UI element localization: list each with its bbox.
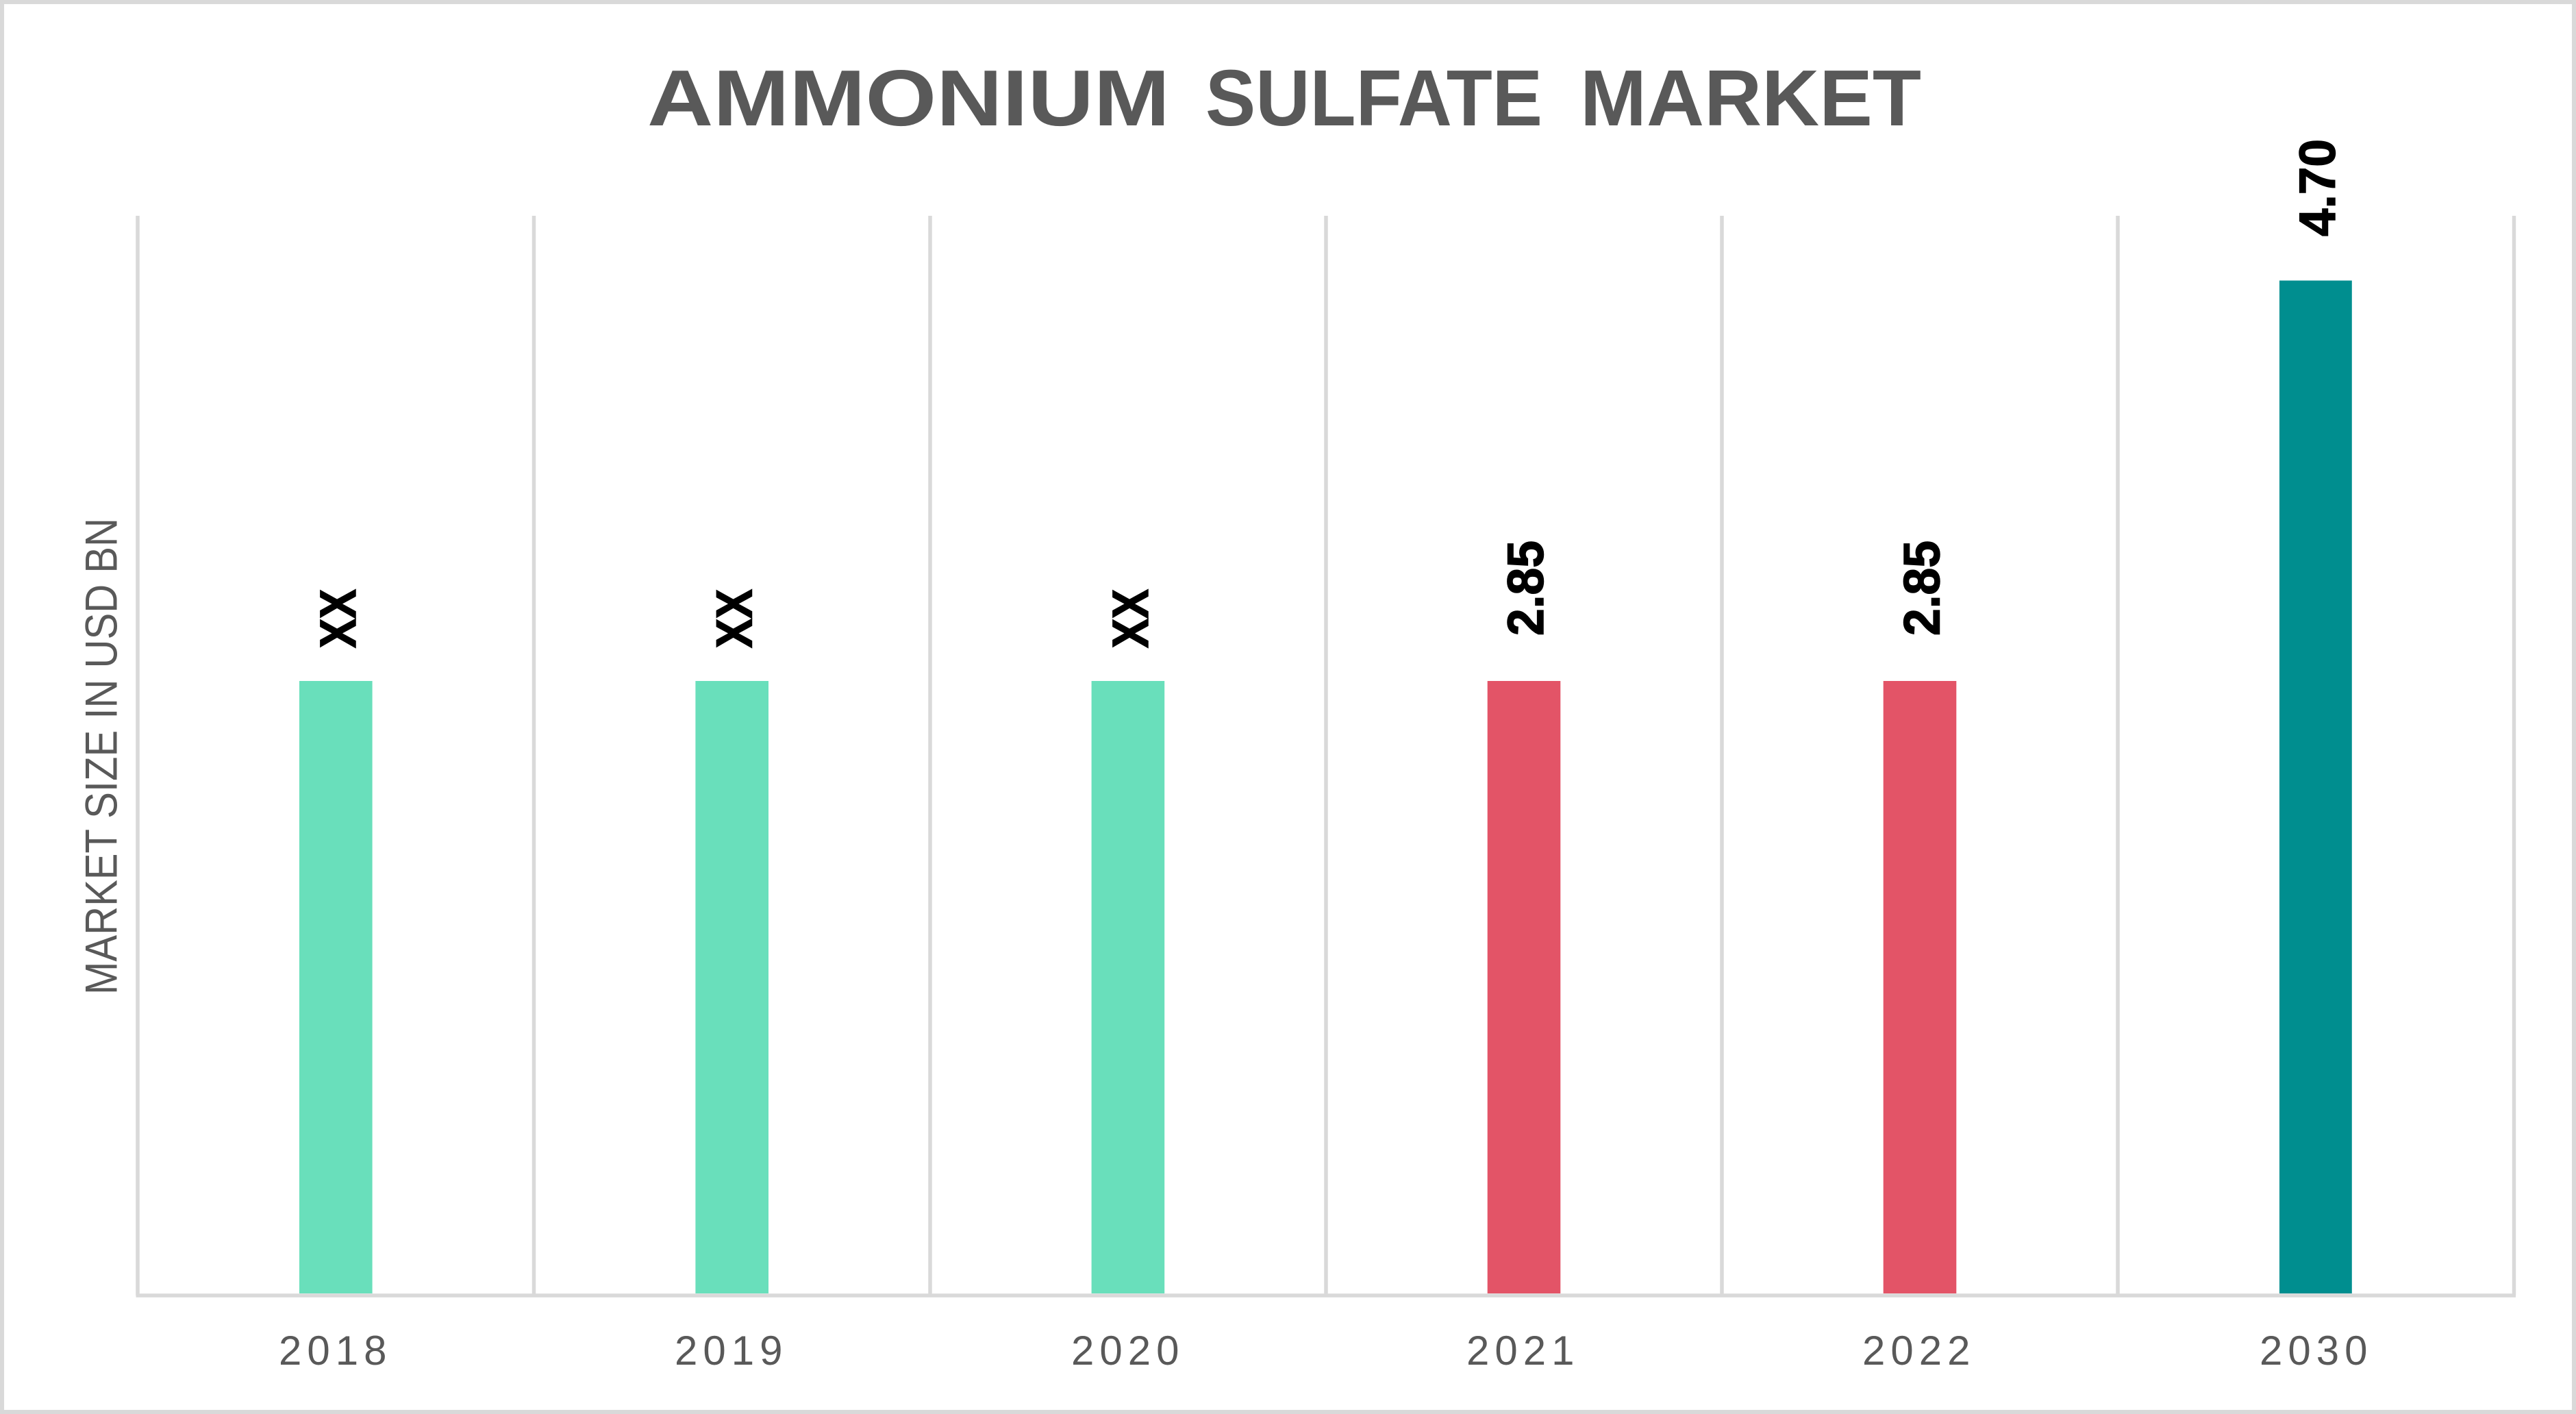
year: 2018: 2018 — [279, 1328, 392, 1374]
value labels — [310, 139, 2346, 648]
value: 2019: XX — [705, 589, 763, 648]
title: SULFATE — [1205, 53, 1542, 142]
bar: 2020 — [1092, 681, 1164, 1293]
value: 2018: XX — [310, 589, 366, 648]
y axis title: MARKET SIZE IN USD BN — [75, 518, 126, 995]
value: 2021: 2.85 — [1497, 541, 1554, 636]
year: 2030: 2030 — [2260, 1328, 2373, 1374]
year: 2021: 2021 — [1466, 1328, 1579, 1374]
bars — [299, 281, 2352, 1293]
title: MARKET — [1580, 53, 1921, 142]
year: 2020: 2020 — [1071, 1328, 1184, 1374]
x axis labels — [279, 1328, 2373, 1374]
value: 2030: 4.70 — [2289, 139, 2346, 236]
year: 2019: 2019 — [675, 1328, 788, 1374]
value: 2022: 2.85 — [1893, 541, 1951, 636]
bar: 2022 — [1884, 681, 1956, 1293]
title — [647, 53, 1921, 142]
bar: 2019 — [695, 681, 768, 1293]
year: 2022: 2022 — [1862, 1328, 1975, 1374]
bar: 2018 — [299, 681, 373, 1293]
bar: 2021 — [1488, 681, 1560, 1293]
title: AMMONIUM — [647, 53, 1170, 142]
value: 2020: XX — [1102, 589, 1159, 648]
bar: 2030 — [2279, 281, 2352, 1293]
